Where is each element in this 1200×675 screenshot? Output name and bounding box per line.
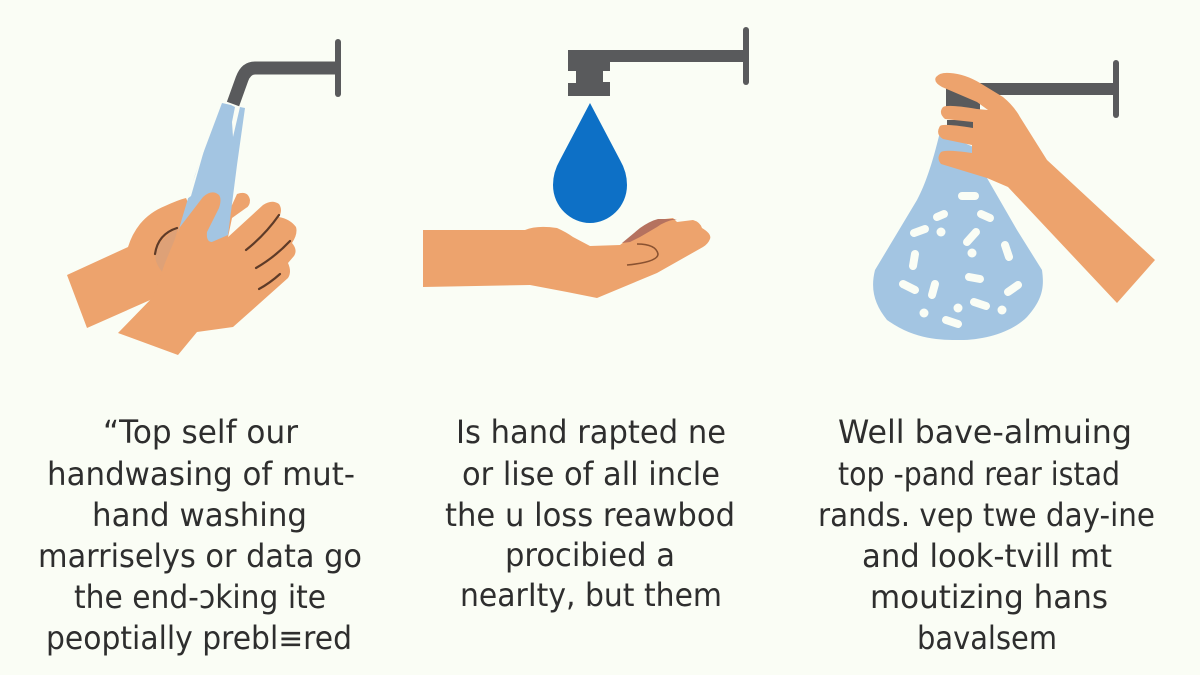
text block: column one: marriselys or data go [38,537,362,575]
icon: finger creases [155,215,290,289]
text block: column three: top -pand rear istad [838,455,1120,493]
text block: column three: bavalsem [917,619,1057,657]
text block: column three: Well bave-almuing [838,413,1132,451]
text block: column three [818,413,1155,657]
text block: column three: moutizing hans [870,578,1108,616]
icon: water drop [553,103,627,223]
text block: column one [38,413,362,657]
icon: back hand [67,193,250,328]
text block: column one: the end-ɔking ite [74,578,326,616]
icon: open hand [423,218,710,298]
text block: column two: Is hand rapted ne [456,413,726,451]
text block: column one: “Top self our [103,413,299,451]
icon: bent faucet [233,39,341,104]
icon: palm shadow [155,228,178,275]
text block: column two: or lise of all incle [462,455,720,493]
panel: washing hands under running tap [67,39,341,355]
text block: column two: procibied a [505,536,675,574]
text block: column one: handwasing of mut- [47,455,355,493]
text block: column two: nearIty, but them [460,576,722,614]
icon: gripping hand and arm [935,73,1155,303]
icon: short faucet [946,60,1119,130]
panel: drop falling into open hand [423,27,749,298]
icon: water stream [178,103,245,245]
text block: column one: peoptially prebl≡red [46,619,352,657]
text block: column two: the u loss reawbod [445,496,735,534]
text block: column two [445,413,735,614]
icon: front hand [118,192,296,355]
icon: water bag with germs [873,132,1043,340]
text block: column three: and look-tvill mt [862,537,1112,575]
panel: hand holding bag with germs [873,60,1155,340]
icon: straight faucet [568,27,749,96]
text block: column three: rands. vep twe day-ine [818,496,1155,534]
text block: column one: hand washing [92,496,307,534]
